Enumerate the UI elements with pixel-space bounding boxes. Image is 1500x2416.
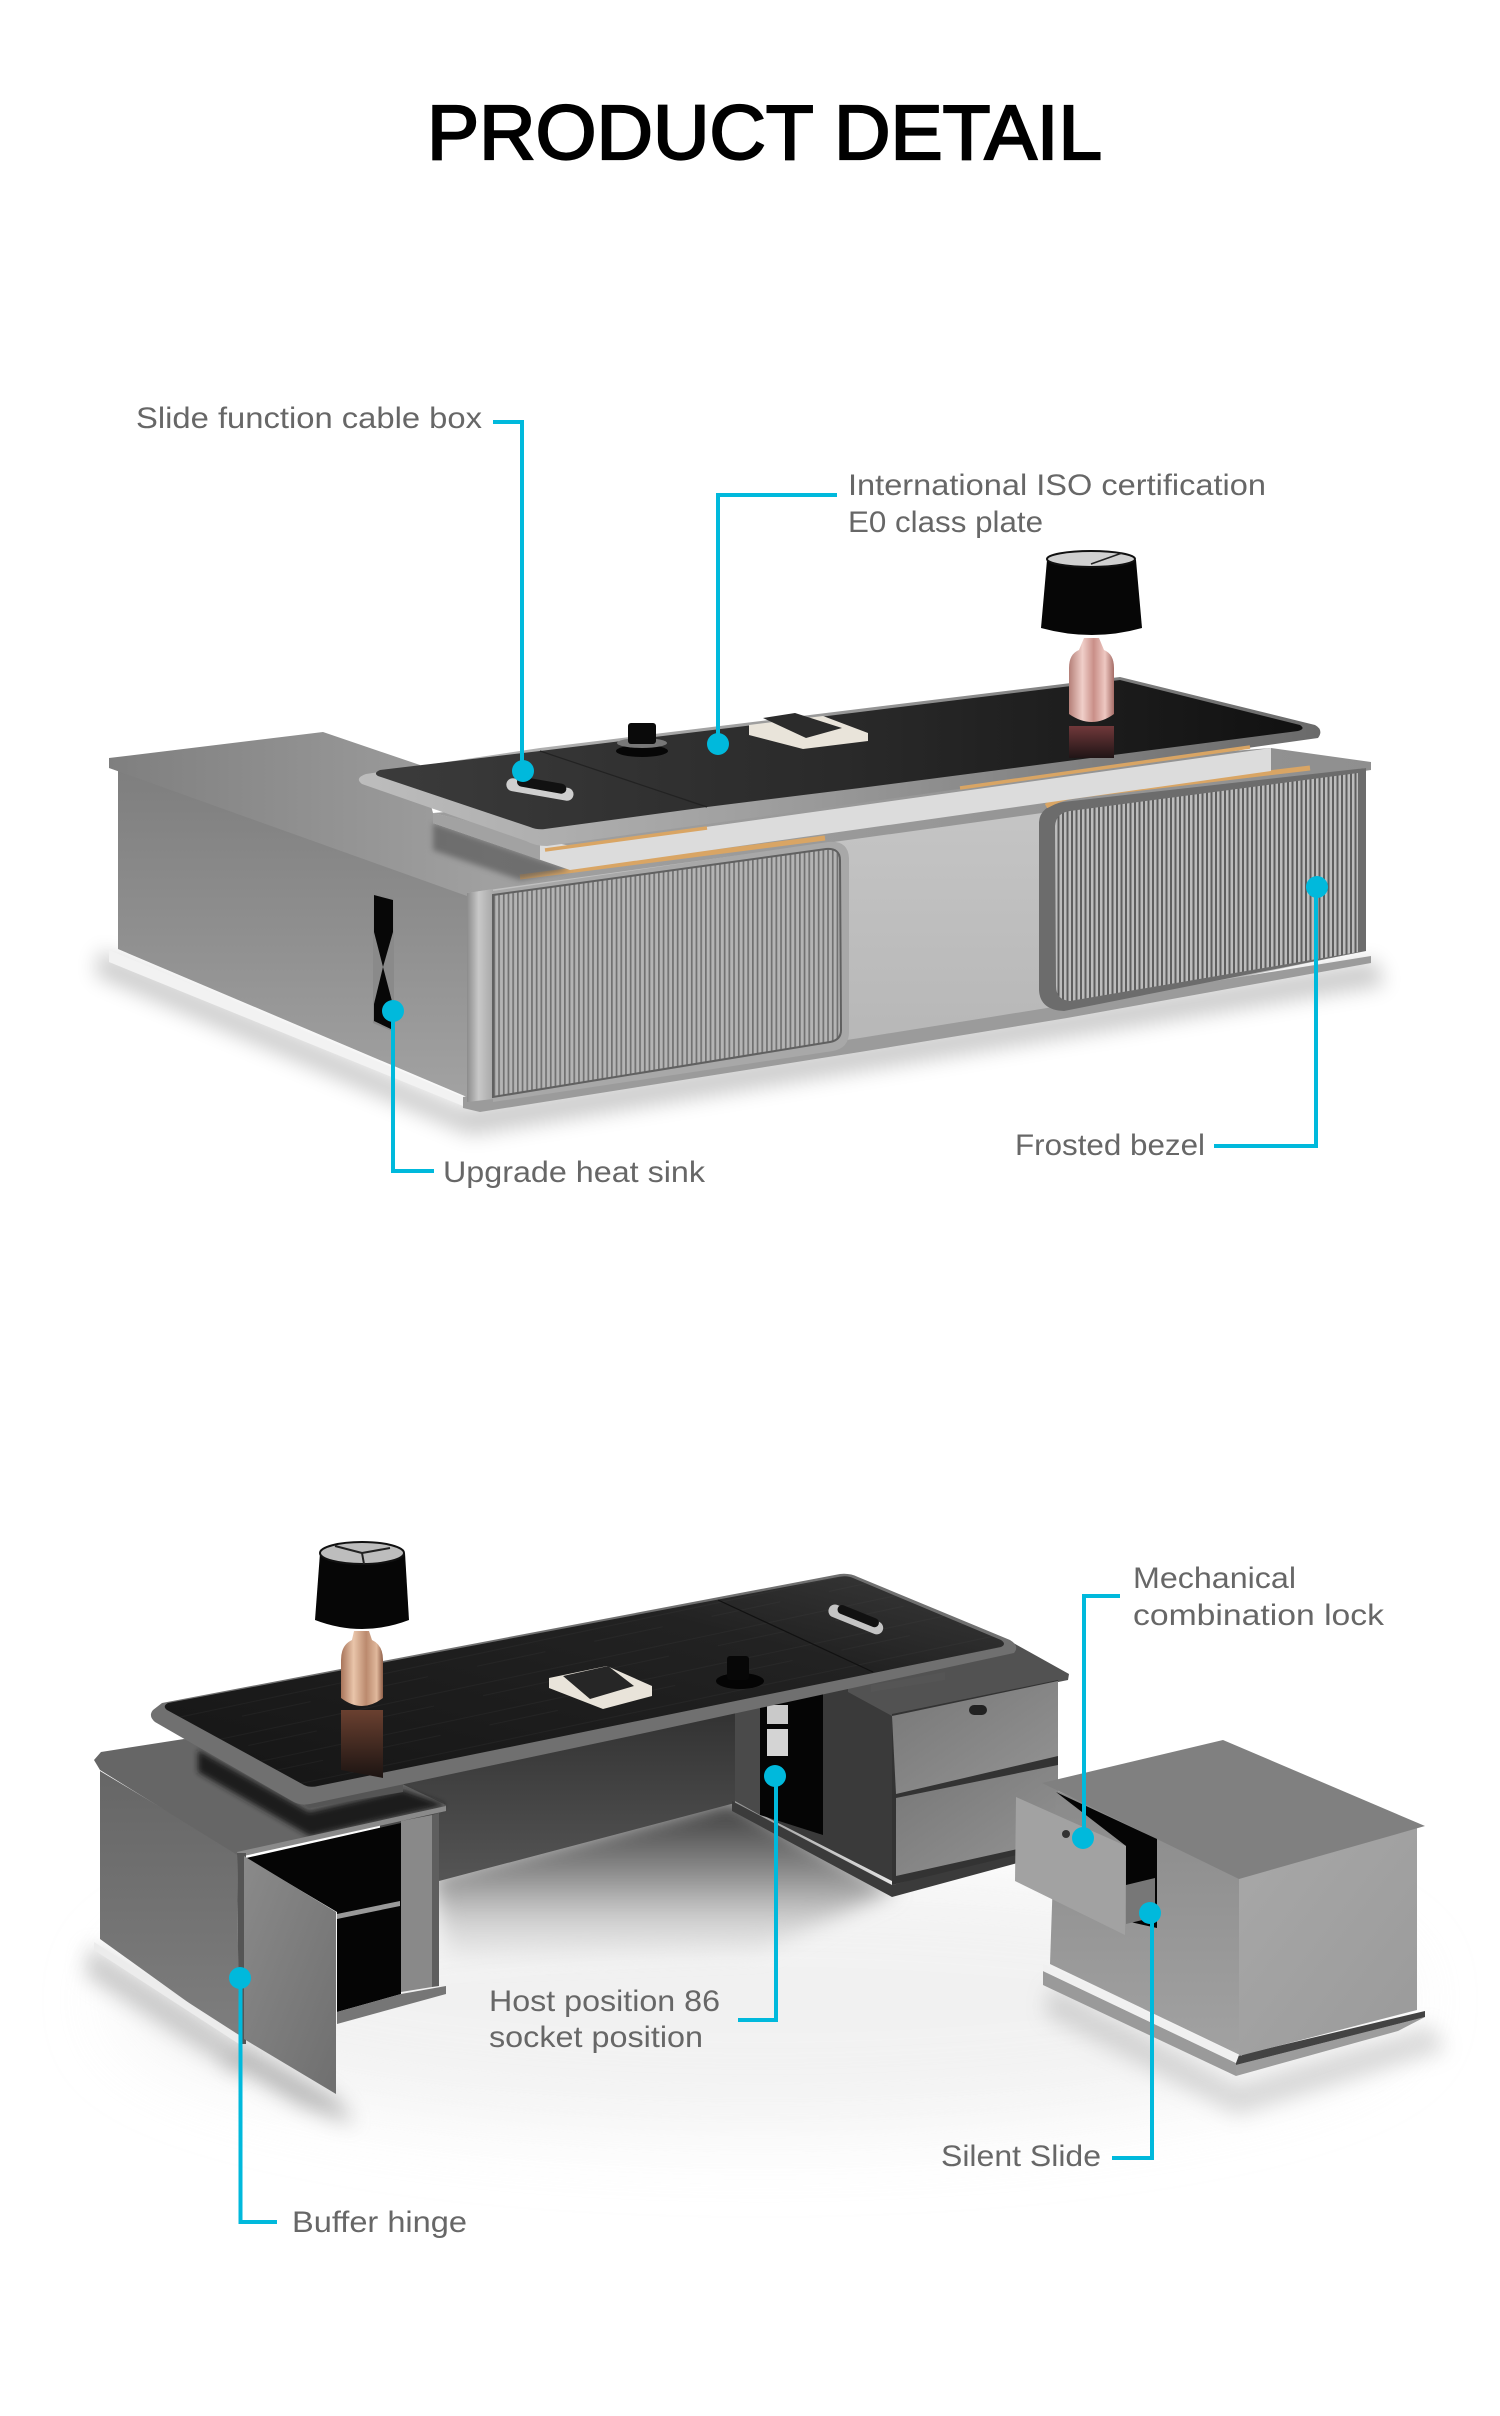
open drawer front: [1015, 1797, 1126, 1935]
shadow on cabinet top: [198, 1750, 446, 1836]
callout: host position socket: Host position 86: [489, 1985, 720, 2018]
callout: host position socket: socket position: [489, 2021, 703, 2054]
callout: silent slide: Silent Slide: [941, 2140, 1101, 2173]
grey column: [735, 1685, 760, 1815]
upper drawer: [892, 1681, 1058, 1794]
desk illustration: closed front with slatted panels: [95, 551, 1385, 1135]
desktop seam: [718, 1600, 873, 1672]
door floor shadow: [225, 2045, 355, 2125]
left cabinet side: [100, 1771, 239, 2039]
right panel frame: [1039, 768, 1366, 1011]
desk bezel: [359, 677, 1320, 846]
black desktop: [376, 680, 1303, 829]
white base strip: [109, 950, 463, 1106]
white base strip: [1043, 1964, 1239, 2063]
cable box: [505, 774, 575, 802]
plate shadow under bezel: [433, 823, 570, 880]
white base strip: [94, 1942, 239, 2044]
light module below bezel: [433, 748, 1271, 870]
table lamp: [1041, 551, 1142, 758]
callout: upgrade heat sink: Upgrade heat sink: [443, 1156, 706, 1189]
black desktop: [165, 1576, 1004, 1787]
cabinet floor shadow: [85, 1945, 240, 2075]
desktop ledge: [298, 1783, 403, 1808]
callout: ISO certification: [707, 469, 1266, 755]
black socket column: [760, 1672, 823, 1835]
desk bezel: [151, 1574, 1016, 1805]
corner post: [467, 889, 493, 1102]
callout: buffer hinge: Buffer hinge: [292, 2206, 467, 2239]
books: [549, 1666, 652, 1709]
rear panel: [380, 1690, 735, 1881]
drawer lock: [969, 1705, 987, 1715]
door post: [237, 1853, 246, 2044]
cabinet post: [432, 1813, 439, 1987]
callout: mechanical combination lock: Mechanical: [1133, 1562, 1296, 1595]
callout: mechanical combination lock: [1072, 1562, 1385, 1849]
left panel frame: [493, 842, 849, 1102]
base top plate: [109, 732, 1371, 896]
interior side panel: [401, 1815, 432, 1992]
floor shadow under desk: [430, 1798, 895, 1960]
callout: upgrade heat sink: [382, 1000, 706, 1189]
module left shading: [433, 813, 540, 860]
cabinet interior: [246, 1823, 401, 2012]
left slatted panel: [493, 849, 841, 1097]
sockets: [767, 1705, 788, 1756]
callout: mechanical combination lock: combination lock: [1133, 1599, 1385, 1632]
callout: frosted bezel: [1015, 876, 1328, 1162]
books: [749, 713, 868, 749]
floor haze: [120, 1870, 1400, 2130]
table lamp: [315, 1542, 409, 1778]
mobile cabinet top: [1042, 1740, 1425, 1879]
right slatted panel: [1055, 773, 1358, 1001]
callout: slide function cable box: Slide function cable box: [136, 402, 482, 435]
title: PRODUCT DETAIL: [427, 90, 1102, 176]
cable box: [826, 1601, 886, 1636]
left cabinet top: [94, 1739, 446, 1856]
desk illustration: rear with open storage: [85, 1542, 1446, 2130]
left side face: [118, 768, 467, 1097]
lower drawer: [896, 1765, 1058, 1876]
callout: host position socket: [489, 1765, 786, 2054]
front face: [467, 768, 1366, 1097]
coffee cup: [716, 1656, 764, 1689]
pedestal inner column: [735, 1660, 900, 1881]
callout: frosted bezel: Frosted bezel: [1015, 1129, 1205, 1162]
drawer interior: [1056, 1792, 1157, 1928]
floor shadow: [95, 950, 1385, 1135]
drawer backing: [892, 1680, 1058, 1885]
drawer side rail: [1126, 1878, 1155, 1924]
amber glow lines: [520, 768, 1310, 877]
pedestal base rail: [732, 1801, 1058, 1897]
mobile cabinet right face: [1239, 1826, 1417, 2056]
desktop grain: [165, 1576, 1004, 1787]
callout: ISO certification: International ISO certification: [848, 469, 1266, 502]
mobile base rail: [1043, 1971, 1236, 2076]
bezel amber edge: [545, 747, 1250, 850]
shelf: [337, 1901, 400, 1919]
coffee cup: [616, 723, 668, 757]
heat sink vent: [373, 893, 394, 1032]
front base rail: [463, 956, 1371, 1112]
front lip of top: [237, 1806, 446, 1857]
mobile base dark: [1236, 2011, 1425, 2065]
mobile cabinet floor shadow: [1045, 1985, 1446, 2115]
bracket: [871, 1672, 945, 1692]
callout: ISO certification: E0 class plate: [848, 506, 1043, 539]
callout: silent slide: [941, 1902, 1161, 2173]
drawer lock: [1062, 1830, 1070, 1838]
cabinet base: [337, 1986, 446, 2024]
mobile base right lower: [1236, 2017, 1425, 2076]
callout: slide function cable box: [136, 402, 534, 782]
open door: [244, 1856, 336, 2094]
mobile cabinet left face: [1050, 1790, 1242, 2056]
desktop seam: [540, 751, 707, 807]
pedestal top: [848, 1640, 1069, 1716]
callout: buffer hinge: [229, 1967, 467, 2239]
